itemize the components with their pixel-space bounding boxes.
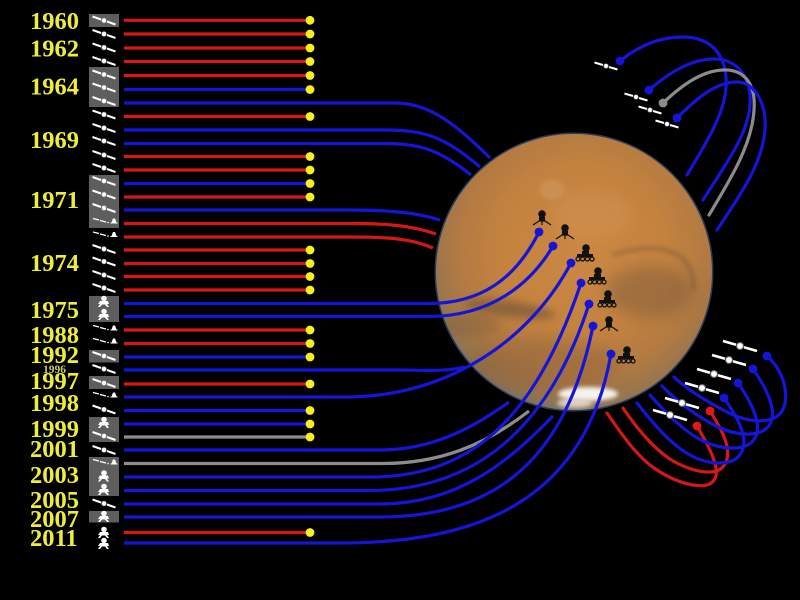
year labels: 2005: [30, 487, 79, 514]
lower right orbiters: [653, 341, 757, 420]
surface lander and rover icons: [533, 210, 635, 363]
year labels: 1999: [30, 416, 79, 443]
year labels: 1997: [30, 368, 79, 395]
surface landing dots: [535, 228, 615, 358]
gray year-group panels: [89, 14, 119, 522]
year labels: 1962: [30, 36, 79, 62]
year labels: 2011: [30, 525, 78, 552]
upper right orbiters: [594, 62, 678, 128]
year labels: 1998: [30, 390, 79, 417]
mission lines reaching Mars: [124, 103, 611, 543]
year labels: 1988: [30, 322, 79, 349]
year labels: 1960: [30, 8, 79, 35]
year labels: [30, 8, 79, 552]
year labels: 1969: [30, 127, 79, 154]
year labels: 1974: [30, 250, 79, 277]
yellow end dots: [306, 16, 314, 537]
year labels: 2001: [30, 436, 79, 463]
lower right orbit arcs: [607, 352, 786, 486]
year labels: 1996: [43, 364, 66, 376]
year labels: 2007: [30, 506, 79, 533]
year labels: 2003: [30, 462, 79, 489]
year labels: 1971: [30, 187, 79, 214]
year labels: 1964: [30, 74, 79, 100]
year labels: 1992: [30, 342, 79, 369]
Mars globe: [434, 132, 714, 412]
spacecraft icon column: [92, 16, 118, 549]
upper right orbit insertion arcs: [616, 37, 765, 230]
failed and early mission lines ending in yellow dots: [124, 20, 310, 533]
year labels: 1975: [30, 297, 79, 324]
